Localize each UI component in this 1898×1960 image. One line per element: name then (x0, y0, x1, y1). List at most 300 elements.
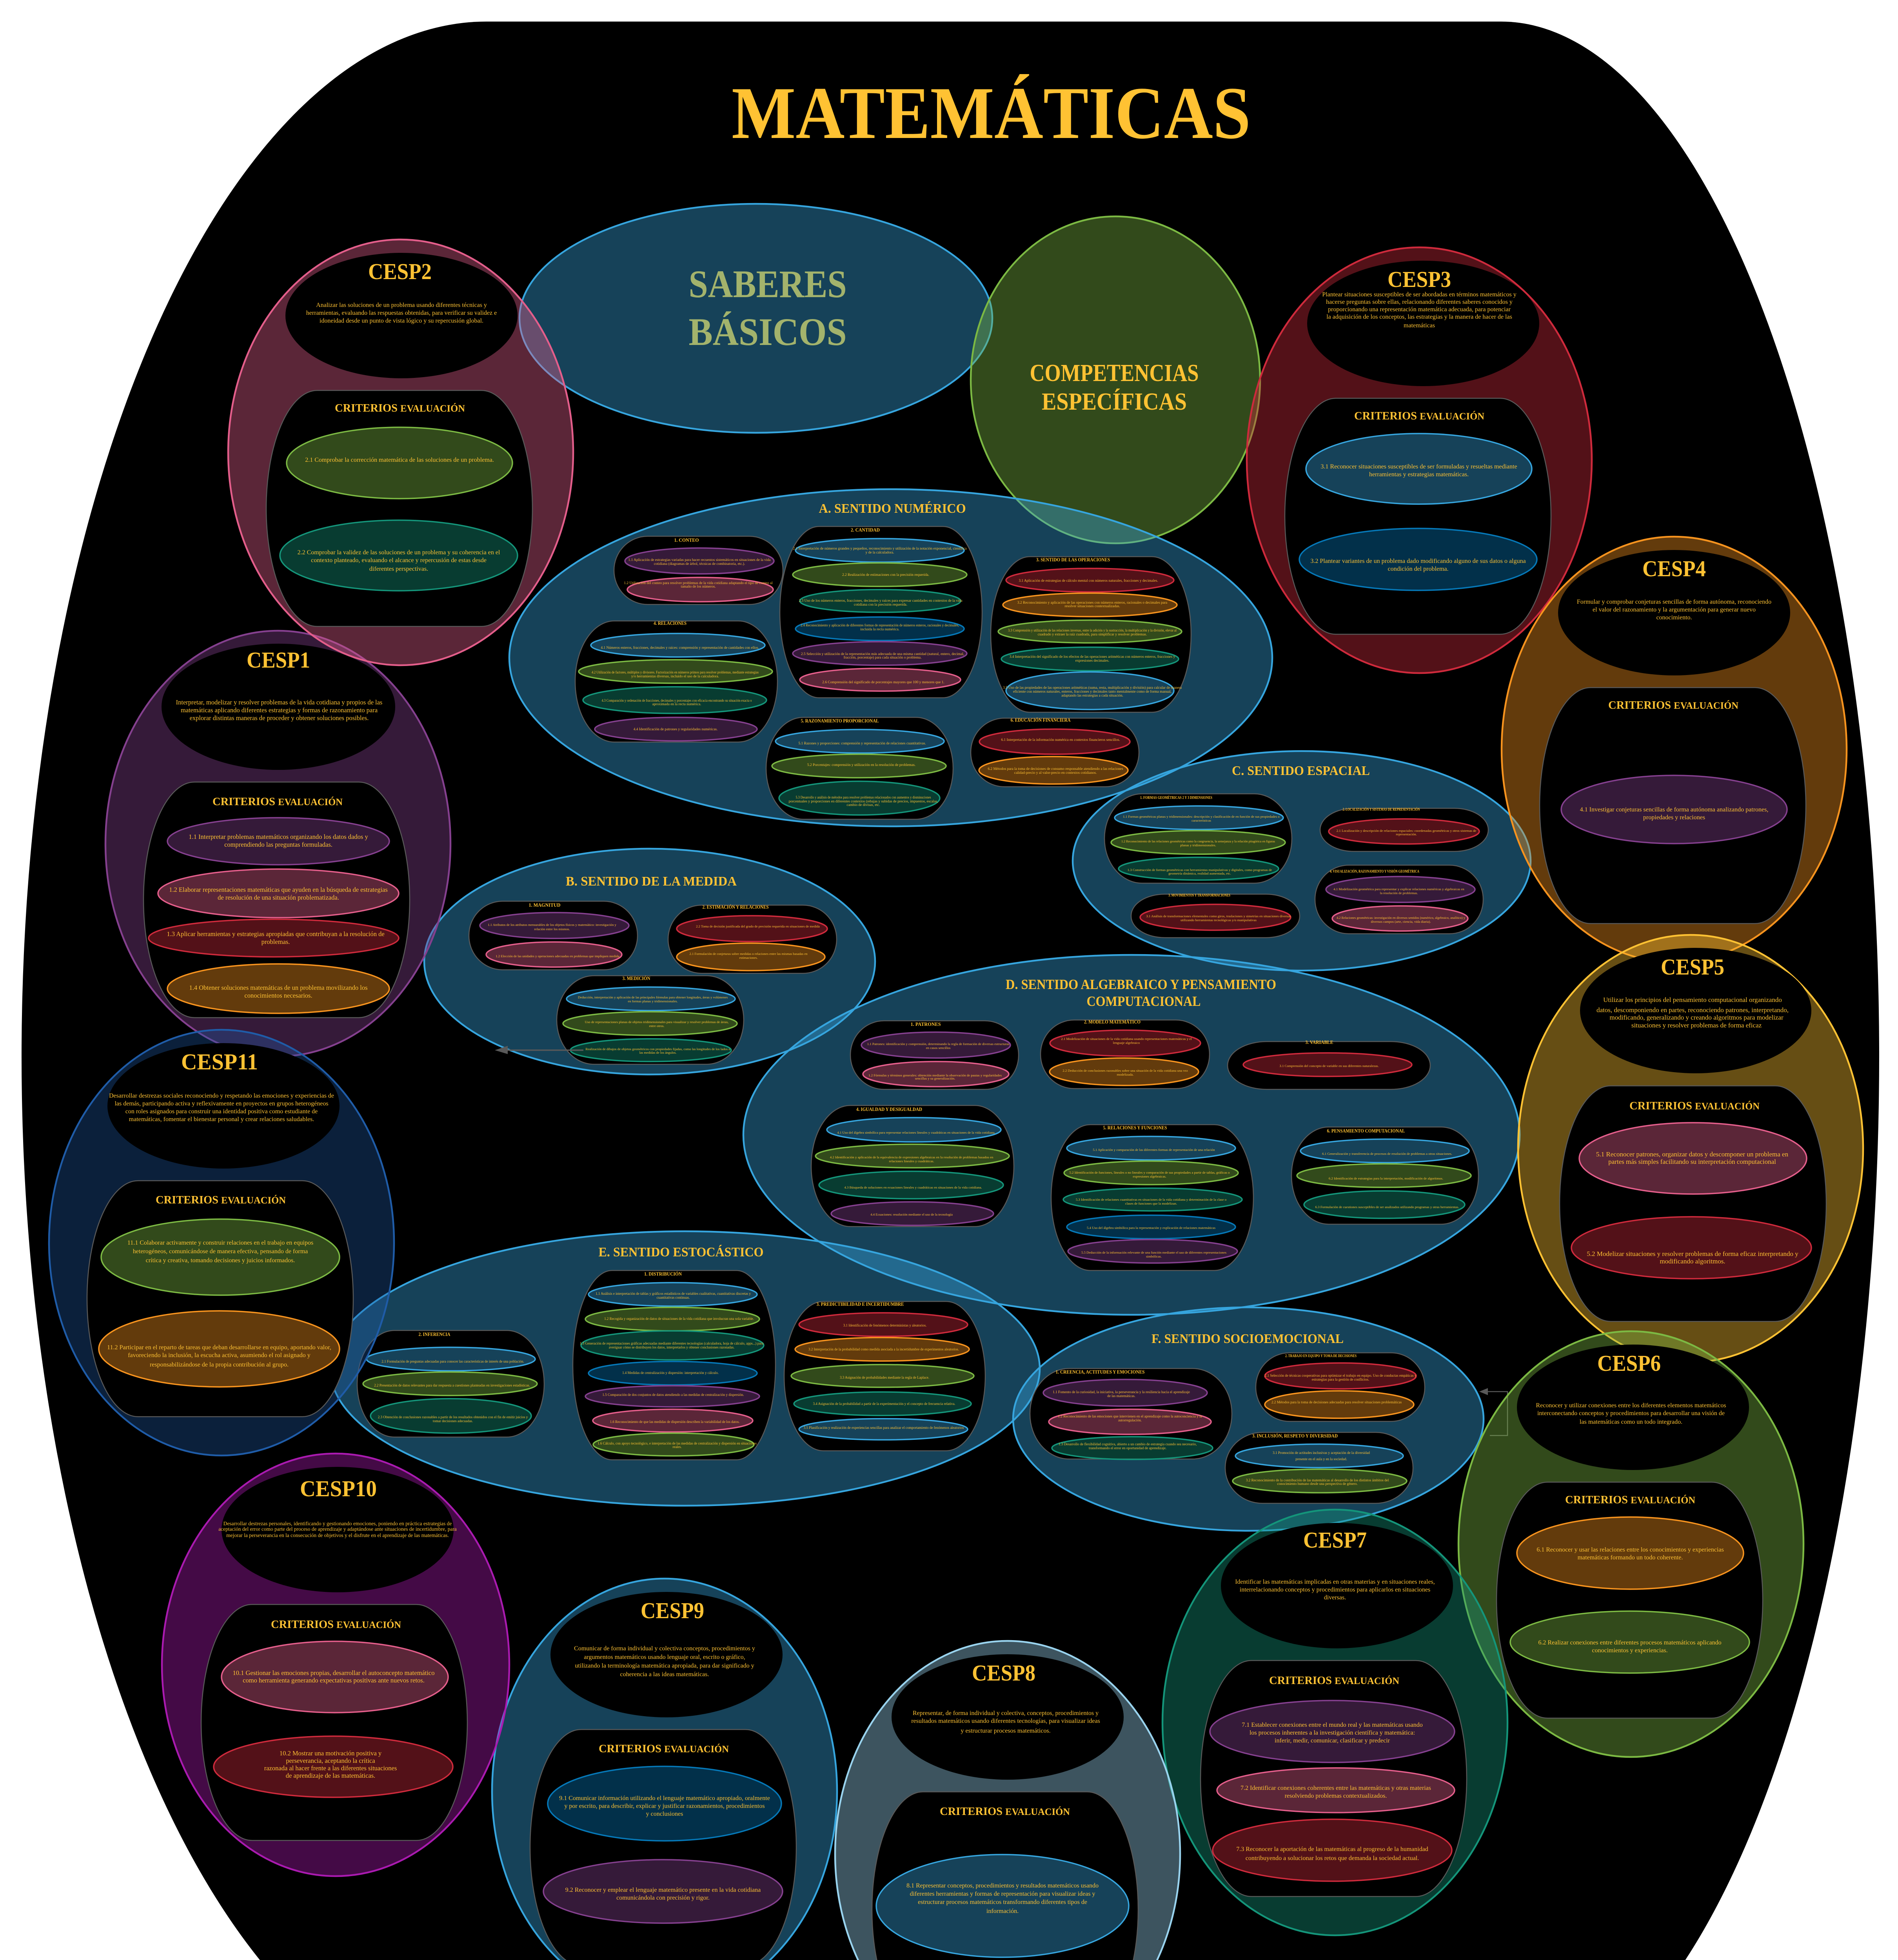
panel: 2 localización: 2. LOCALIZACIÓN Y SISTEMAS DE REPRESENTACIÓN (1342, 807, 1420, 812)
panel: 4 igualdad y desigualdad: 4.2 Identificación y aplicación de la equivalencia de expresiones algebraicas en la resolución de problemas basados en (830, 1155, 993, 1159)
panel: CESP3: 3.2 Plantear variantes de un problema dado modificando alguno de sus datos o alguna (1310, 558, 1526, 564)
panel: CESP7: CRITERIOS EVALUACIÓN (1269, 1674, 1399, 1687)
panel: 5 razonamiento proporcional: cambio de divisas, etc. (846, 803, 880, 807)
panel: 3 sentido de las operaciones: 3. SENTIDO DE LAS OPERACIONES (1036, 557, 1110, 563)
panel: 1 creencia, actitudes y emociones: 1.3 Desarrollo de flexibilidad cognitiva, abierto a un cambio de estrategia cuando sea necesario, (1059, 1442, 1197, 1446)
panel: 3 inclusión, respeto y diversidad: 3.1 Promoción de actitudes inclusivas y aceptación de la diversidad (1273, 1451, 1370, 1455)
panel: 4 relaciones: aproximada en la recta numérica. (652, 702, 701, 706)
panel: CESP8: y estructurar procesos matemáticos. (961, 1728, 1051, 1734)
panel: CESP6: CRITERIOS EVALUACIÓN (1565, 1494, 1695, 1506)
panel: 2 cantidad: 2.1 Interpretación de números grandes y pequeños, reconocimiento y utilización de la notación exponencial, científica (793, 547, 966, 551)
panel: CESP11 (49, 1030, 394, 1455)
panel: CESP3 (1247, 247, 1592, 673)
competencias específicas bubble (971, 216, 1260, 543)
panel: 2 localización: 2.1 Localización y descripción de relaciones espaciales: coordenadas geométricas y otros sistemas de (1337, 829, 1476, 833)
panel: CESP1: CRITERIOS EVALUACIÓN (213, 795, 343, 808)
panel: CESP9: y por escrito, para describir, explicar y justificar razonamientos, procedimientos (564, 1803, 765, 1809)
panel: CESP10: como herramienta generando expectativas positivas ante nuevos retos. (243, 1677, 425, 1684)
panel: 2 estimación y relaciones: 2.2 Toma de decisión justificada del grado de precisión requerida en situaciones de medida (696, 924, 820, 928)
panel: 3 medición (557, 975, 744, 1064)
panel: 1 conteo: 1.1 Aplicación de estrategias variadas para hacer recuentos sistemáticos en situaciones de la vida (628, 558, 770, 562)
panel: 1 magnitud: 1. MAGNITUD (529, 902, 561, 908)
panel: 3 inclusión, respeto y diversidad: 3.2 Reconocimiento de la contribución de las matemáticas al desarrollo de los distintos ámbitos del (1246, 1478, 1389, 1482)
panel: 3 sentido de las operaciones: cuadrado y extraer la raíz cuadrada, para simplificar y resolver problemas. (1038, 632, 1147, 637)
panel: 1 conteo: 1.2 Utilización del conteo para resolver problemas de la vida cotidiana adaptando el tipo de conteo al (624, 581, 773, 585)
panel: CESP11: CESP11 (181, 1049, 258, 1074)
panel: 1 magnitud: 1.1 Atributos de los atributos mensurables de los objetos físicos y matemático: investigación y (488, 923, 616, 927)
panel: 3 variable: 3. VARIABLE (1306, 1039, 1333, 1045)
section D: sentido algebraico y pensamiento computacional (743, 955, 1520, 1315)
panel: 4 visualización: 4.1 Modelización geométrica para representar y explicar relaciones numéricas y algebraicas en (1333, 887, 1464, 891)
panel: CESP1 (105, 631, 450, 1056)
panel: CESP11: responsabilizándose de la propia contribución al grupo. (150, 1361, 289, 1368)
panel: 1 formas geométricas: planas y tridimensionales. (1180, 843, 1216, 847)
panel: 3 sentido de las operaciones: 3.3 Comprensión y utilización de las relaciones inversas, entre la adición y la sustracción, la multiplicación y la división, elevar al (1008, 629, 1177, 633)
panel: 3 sentido de las operaciones (991, 557, 1191, 712)
section B: sentido de la medida: B. SENTIDO DE LA MEDIDA (566, 874, 737, 889)
panel: CESP10: 10.2 Mostrar una motivación positiva y (280, 1749, 381, 1757)
panel: 1 patrones: en casos sencillos (926, 1046, 951, 1050)
panel: 3 movimientos: 3.1 Análisis de transformaciones elementales como giros, traslaciones y simetrías en situaciones diversas (1146, 914, 1291, 918)
panel: CESP3: matemáticas (1404, 322, 1435, 329)
panel: CESP7 (1162, 1510, 1508, 1935)
panel: CESP6: conocimientos y experiencias. (1592, 1647, 1668, 1654)
panel: 3 predictibilidad e incertidumbre: 3.2 Interpretación de la probabilidad como medida asociada a la incertidumbre de experimentos aleatorios. (808, 1347, 959, 1351)
panel: 1 distribución: 1.5 Comparación de dos conjuntos de datos atendiendo a las medidas de centralización y dispersión. (603, 1393, 744, 1397)
panel: CESP7: los procesos inherentes a la investigación científica y matemática: (1250, 1730, 1415, 1736)
panel: CESP3: herramientas y estrategias matemáticas. (1369, 471, 1469, 478)
section E: sentido estocástico (330, 1231, 1040, 1506)
panel: CESP9: CRITERIOS EVALUACIÓN (599, 1742, 729, 1755)
panel: CESP2: CRITERIOS EVALUACIÓN (335, 402, 465, 414)
panel: CESP1: conocimientos necesarios. (244, 992, 312, 999)
panel: 2 estimación y relaciones: 2. ESTIMACIÓN Y RELACIONES (703, 904, 768, 910)
panel: 3 sentido de las operaciones: 3.1 Aplicación de estrategias de cálculo mental con números naturales, fracciones y decimales. (1019, 579, 1158, 583)
panel: 1 creencia, actitudes y emociones: 1. CREENCIA, ACTITUDES Y EMOCIONES (1055, 1369, 1145, 1375)
panel: 2 inferencia: tomar decisiones adecuadas. (433, 1419, 473, 1423)
panel: 5 relaciones y funciones: 5.5 Deducción de la información relevante de una función mediante el uso de diferentes representaciones (1081, 1250, 1226, 1254)
panel: 6 educación financiera (971, 717, 1139, 787)
panel: CESP2: herramientas, evaluando las respuestas obtenidas, para verificar su validez e (306, 310, 497, 316)
panel: CESP7: resolviendo problemas contextualizados. (1285, 1793, 1387, 1799)
panel: CESP4: CESP4 (1642, 556, 1706, 581)
panel: 1 creencia, actitudes y emociones: transformando el error en oportunidad de aprendizaje. (1089, 1446, 1166, 1450)
panel: 1 creencia, actitudes y emociones (1030, 1368, 1232, 1459)
panel: CESP3: hacerse preguntas sobre ellas, relacionando diferentes saberes conocidos y (1326, 299, 1513, 305)
panel: 3 predictibilidad e incertidumbre: 3.1 Identificación de fenómenos deterministas y aleatorios. (843, 1323, 926, 1327)
panel: 1 formas geométricas: 1.3 Construcción de formas geométricas con herramientas manipulativas y digitales, como programas de (1128, 868, 1272, 872)
panel: CESP1: 1.2 Elaborar representaciones matemáticas que ayuden en la búsqueda de estrategias (169, 886, 388, 893)
panel: 2 trabajo en equipo: 2.2 Métodos para la toma de decisiones adecuadas para resolver situaciones problemáticas (1271, 1400, 1402, 1404)
panel: 2 modelo matemático (1041, 1019, 1210, 1089)
section C: sentido espacial: C. SENTIDO ESPACIAL (1232, 764, 1370, 778)
panel: 1 creencia, actitudes y emociones: autorregulación. (1118, 1418, 1142, 1422)
panel: 4 relaciones: y/o herramientas diversas, incluido el uso de la calculadora. (631, 675, 719, 679)
panel: 5 relaciones y funciones: simbólicas. (1146, 1254, 1162, 1258)
panel: 2 inferencia (357, 1330, 544, 1437)
panel: 2 cantidad: incluida la recta numérica. (860, 628, 899, 632)
panel: CESP6: 6.1 Reconocer y usar las relaciones entre los conocimientos y experiencias (1537, 1546, 1724, 1553)
panel: 1 distribución: 1.1 Análisis e interpretación de tablas y gráficos estadísticos de variables cualitativas, cuantitativas discretas y (596, 1292, 751, 1296)
panel: 1 conteo: 1. CONTEO (674, 537, 699, 543)
panel: 5 relaciones y funciones: expresiones algebraicas. (1133, 1174, 1166, 1178)
panel: CESP10: 10.1 Gestionar las emociones propias, desarrollar el autoconcepto matemático (233, 1669, 434, 1677)
panel: CESP1: problemas. (262, 938, 290, 946)
panel: CESP10: perseverancia, aceptando la crítica (286, 1757, 375, 1764)
panel: 5 razonamiento proporcional: porcentuales y proporciones en diferentes contextos (rebajas y subidas de precios, impuestos, escalas, (789, 800, 938, 804)
panel: 4 igualdad y desigualdad: 4.3 Búsqueda de soluciones en ecuaciones lineales y cuadráticas en situaciones de la vida cotidiana. (844, 1185, 982, 1189)
panel: 2 estimación y relaciones (668, 904, 837, 973)
panel: CESP9: 9.2 Reconocer y emplear el lenguaje matemático presente en la vida cotidiana (565, 1887, 761, 1893)
section E: sentido estocástico: E. SENTIDO ESTOCÁSTICO (598, 1245, 764, 1259)
panel: 1 formas geométricas: 1.2 Reconocimiento de las relaciones geométricas como la congruencia, la semejanza y la relación pitagórica en figuras (1121, 839, 1275, 843)
panel: 6 educación financiera: 6.1 Interpretación de la información numérica en contextos financieros sencillos. (1001, 738, 1120, 742)
panel: 6 educación financiera: calidad-precio y al valor-precio en contextos cotidianos. (1014, 771, 1097, 775)
panel: CESP5: CRITERIOS EVALUACIÓN (1629, 1100, 1760, 1112)
panel: 6 educación financiera: 6.2 Métodos para la toma de decisiones de consumo responsable atendiendo a las relaciones (988, 767, 1123, 771)
panel: 4 relaciones (575, 620, 777, 742)
saberes básicos bubble: SABERES (688, 262, 847, 306)
panel: CESP1: CESP1 (247, 647, 310, 673)
section F: sentido socioemocional: F. SENTIDO SOCIOEMOCIONAL (1152, 1332, 1344, 1346)
panel: 3 sentido de las operaciones: 3.5 Uso de las propiedades de las operaciones aritméticas (suma, resta, multiplicación y división) para calcular de manera (1003, 686, 1182, 690)
panel: CESP7: contribuyendo a solucionar los retos que demanda la sociedad actual. (1246, 1855, 1419, 1862)
panel: CESP10: Desarrollar destrezas personales, identificando y gestionando emociones, poniendo en práctica estrategias de (223, 1521, 452, 1526)
panel: 2 inferencia: 2.3 Obtención de conclusiones razonables a partir de los resultados obtenidos con el fin de emitir juicios y (378, 1415, 528, 1419)
panel: 3 inclusión, respeto y diversidad (1225, 1432, 1413, 1503)
panel: 2 cantidad: fracción, porcentaje) para cada situación o problema. (844, 655, 921, 660)
panel: 3 predictibilidad e incertidumbre: 3.4 Asignación de la probabilidad a partir de la experimentación y el concepto de frecuencia relativa. (813, 1402, 955, 1406)
panel: 2 cantidad: 2.2 Realización de estimaciones con la precisión requerida. (842, 573, 929, 577)
panel: CESP10: razonada al hacer frente a las diferentes situaciones (264, 1764, 397, 1772)
panel: 3 inclusión, respeto y diversidad: 3. INCLUSIÓN, RESPETO Y DIVERSIDAD (1252, 1433, 1338, 1439)
panel: CESP6: las matemáticas como un todo integrado. (1580, 1419, 1682, 1425)
panel: 1 formas geométricas: 1. FORMAS GEOMÉTRICAS 2 Y 3 DIMENSIONES (1140, 795, 1212, 800)
panel: CESP1: 1.4 Obtener soluciones matemáticas de un problema movilizando los (189, 984, 368, 991)
panel: 1 distribución: 1.4 Medidas de centralización y dispersión: interpretación y cálculo. (622, 1371, 719, 1375)
panel: 2 inferencia: 2. INFERENCIA (419, 1331, 450, 1337)
panel: 3 variable: 3.1 Comprensión del concepto de variable en sus diferentes naturalezas. (1279, 1064, 1379, 1068)
panel: 1 formas geométricas: 1.1 Formas geométricas planas y tridimensionales: descripción y clasificación de en función de sus propiedades o (1123, 815, 1280, 818)
panel: 6 pensamiento computacional: 6.2 Identificación de estrategias para la interpretación, modificación de algoritmos. (1329, 1176, 1443, 1180)
panel: CESP7: inferir, medir, comunicar, clasificar y predecir (1275, 1737, 1390, 1744)
panel: 1 distribución: 1.6 Reconocimiento de que las medidas de dispersión describen la variabilidad de los datos. (610, 1420, 739, 1424)
panel: 5 razonamiento proporcional: 5. RAZONAMIENTO PROPORCIONAL (801, 718, 879, 724)
panel: CESP7: diversas. (1324, 1594, 1346, 1601)
panel: CESP3: CRITERIOS EVALUACIÓN (1354, 410, 1484, 422)
panel: 2 modelo matemático: 2.1 Modelización de situaciones de la vida cotidiana usando representaciones matemáticas y el (1061, 1037, 1192, 1041)
panel: 2 estimación y relaciones: estimaciones. (739, 956, 758, 960)
panel: CESP3: Plantear situaciones susceptibles de ser abordadas en términos matemáticos y (1322, 291, 1517, 298)
saberes básicos bubble (519, 204, 992, 433)
panel: 3 predictibilidad e incertidumbre: 3.5 Planificación y realización de experiencias sencillas para analizar el comportamiento de fenómenos aleatorios (804, 1426, 964, 1430)
section C: sentido espacial (1073, 751, 1531, 971)
panel: 5 relaciones y funciones: 5.3 Identificación de relaciones cuantitativas en situaciones de la vida cotidiana y determinación de la clase o (1076, 1198, 1226, 1201)
panel: 1 magnitud: relación entre los mismos. (534, 927, 570, 931)
panel: CESP8: información. (986, 1908, 1019, 1915)
panel: CESP8: estructurar procesos matemáticos transformando diferentes tipos de (918, 1899, 1087, 1906)
panel: 1 patrones: 1.2 Fórmulas y términos generales: obtención mediante la observación de pautas y regularidades (868, 1073, 1002, 1077)
panel: 5 razonamiento proporcional: 5.3 Desarrollo y análisis de métodos para resolver problemas relacionados con aumentos y disminuciones (796, 796, 931, 800)
panel: 1 creencia, actitudes y emociones: 1.1 Fomento de la curiosidad, la iniciativa, la perseverancia y la resiliencia hacia el aprendizaje (1053, 1390, 1190, 1394)
panel: 1 conteo: tamaño de los números. (681, 585, 716, 589)
panel: 3 movimientos: 3. MOVIMIENTOS Y TRANSFORMACIONES (1168, 893, 1230, 898)
panel: 1 patrones (850, 1021, 1019, 1089)
panel: CESP5: datos, descomponiendo en partes, reconociendo patrones, interpretando, (1596, 1006, 1789, 1014)
panel: 4 relaciones: 4.2 Utilización de factores, múltiplos y divisores. Factorización en números primos para resolver problemas, mediante estrategias (592, 670, 759, 675)
panel: 2 cantidad: 2.4 Reconocimiento y aplicación de diferentes formas de representación de números enteros, racionales y decimales, (801, 623, 959, 628)
panel: 4 visualización (1315, 865, 1483, 934)
panel: CESP2: CESP2 (368, 259, 432, 284)
section F: sentido socioemocional (1013, 1307, 1484, 1531)
panel: CESP6: interconectando conceptos y procedimientos para desarrollar una visión de (1537, 1410, 1725, 1417)
panel: 3 medición: en formas planas y tridimensionales. (628, 999, 678, 1003)
panel: CESP3: condición del problema. (1388, 566, 1449, 572)
panel: CESP6: CESP6 (1597, 1350, 1661, 1376)
panel: 3 inclusión, respeto y diversidad: presente en el aula y en la sociedad. (1295, 1457, 1347, 1461)
panel: 4 visualización: 4. VISUALIZACIÓN, RAZONAMIENTO Y VISIÓN GEOMÉTRICA (1330, 869, 1419, 874)
panel: 2 cantidad: y de la calculadora. (866, 551, 894, 555)
panel: CESP7: 7.2 Identificar conexiones coherentes entre las matemáticas y otras materias (1241, 1785, 1431, 1791)
panel: 5 razonamiento proporcional (766, 717, 953, 819)
panel: CESP5 (1518, 935, 1863, 1362)
panel: 6 pensamiento computacional (1291, 1127, 1478, 1224)
panel: CESP3: proporcionando una representación matemática adecuada, para potenciar (1328, 306, 1511, 313)
panel: 3 medición: 3. MEDICIÓN (623, 975, 650, 981)
panel: 1 conteo (614, 536, 783, 604)
panel: 3 sentido de las operaciones: adaptando las estrategias a cada situación. (1061, 694, 1123, 698)
panel: 1 patrones: 1.1 Patrones: identificación y comprensión, determinando la regla de formación de diversas estructuras (867, 1042, 1009, 1046)
panel: CESP5: Utilizar los principios del pensamiento computacional organizando (1603, 996, 1782, 1004)
panel: 1 distribución: 1.6 Cálculo, con apoyo tecnológico, e interpretación de las medidas de centralización y dispersión en situaciones (598, 1441, 757, 1445)
panel: CESP4: el valor del razonamiento y la argumentación para generar nuevo (1593, 606, 1756, 613)
panel: CESP5: partes más simples facilitando su interpretación computacional (1608, 1158, 1776, 1165)
panel: 2 inferencia: 2.2 Presentación de datos relevantes para dar respuesta a cuestiones planteadas en investigaciones estadísticas. (374, 1383, 530, 1387)
panel: 3 sentido de las operaciones: 3.4 Interpretación del significado de los efectos de las operaciones aritméticas con números enteros, fracciones y (1010, 655, 1175, 659)
panel: 1 distribución: reales. (672, 1445, 682, 1449)
panel: CESP4: conocimiento. (1656, 614, 1692, 621)
panel: CESP9: 9.1 Comunicar información utilizando el lenguaje matemático apropiado, oralmente (559, 1795, 770, 1802)
panel: 1 magnitud (469, 901, 638, 970)
panel: 3 medición: Uso de representaciones planas de objetos tridimensionales para visualizar y resolver problemas de áreas, (585, 1020, 728, 1024)
panel: 3 sentido de las operaciones: 3.2 Reconocimiento y aplicación de las operaciones con números enteros, racionales o decimales para (1017, 601, 1167, 605)
competencias específicas bubble: COMPETENCIAS (1030, 360, 1199, 387)
panel: 1 distribución: 1.3 Generación de representaciones gráficas adecuadas mediante diferentes tecnologías (calculadora, hoja de cálculo, apps...) para (580, 1341, 763, 1345)
panel: CESP2 (228, 240, 573, 665)
panel: 1 formas geométricas: características (1191, 818, 1211, 822)
panel: CESP2: Analizar las soluciones de un problema usando diferentes técnicas y (316, 302, 487, 309)
panel: CESP9: comunicándola con precisión y rigor. (616, 1895, 710, 1901)
panel: CESP2: contexto planteado, evaluando el alcance y repercusión de estas desde (311, 557, 487, 564)
panel: 1 formas geométricas (1104, 794, 1292, 883)
panel: 6 educación financiera: 6. EDUCACIÓN FINANCIERA (1011, 717, 1071, 723)
panel: CESP11: 11.1 Colaborar activamente y construir relaciones en el trabajo en equipos (127, 1240, 313, 1246)
panel: 3 medición: Deducción, interpretación y aplicación de las principales fórmulas para obtener longitudes, áreas y volúmenes (578, 995, 728, 999)
section B: sentido de la medida (424, 849, 875, 1074)
panel: 5 relaciones y funciones (1051, 1125, 1253, 1270)
panel: CESP5: CESP5 (1661, 954, 1724, 980)
panel: 3 inclusión, respeto y diversidad: conocimiento humano desde una perspectiva de género. (1277, 1482, 1358, 1486)
panel: 2 trabajo en equipo: estrategias para la gestión de conflictos. (1312, 1377, 1369, 1381)
panel: CESP5: 5.2 Modelizar situaciones y resolver problemas de forma eficaz interpretando y (1587, 1250, 1798, 1258)
panel: 5 relaciones y funciones: clases de funciones que la modelizan. (1125, 1201, 1177, 1205)
panel: CESP7: 7.1 Establecer conexiones entre el mundo real y las matemáticas usando (1242, 1722, 1423, 1728)
section D: sentido algebraico y pensamiento computacional: COMPUTACIONAL (1087, 993, 1201, 1009)
panel: CESP1: 1.1 Interpretar problemas matemáticos organizando los datos dados y (189, 833, 368, 840)
panel: 6 pensamiento computacional: 6.1 Generalización y transferencia de procesos de resolución de problemas a otras situaciones. (1322, 1152, 1452, 1156)
title: MATEMÁTICAS (732, 72, 1251, 154)
panel: 4 igualdad y desigualdad: 4.1 Uso del álgebra simbólica para representar relaciones lineales y cuadráticas en situaciones de la vida cotidiana. (837, 1131, 995, 1134)
panel: 2 cantidad: 2.6 Comprensión del significado de porcentajes mayores que 100 y menores que 1. (822, 680, 944, 684)
panel: 5 relaciones y funciones: 5.4 Uso del álgebra simbólica para la representación y explicación de relaciones matemáticas (1087, 1226, 1216, 1230)
panel: CESP11: las demás, participando activa y reflexivamente en proyectos en grupos heterogéneos (114, 1100, 329, 1107)
panel: 3 medición: Realización de dibujos de objetos geométricos con propiedades fijadas, como las longitudes de los lados o (585, 1047, 730, 1051)
panel: CESP2: 2.2 Comprobar la validez de las soluciones de un problema y su coherencia en el (298, 549, 500, 556)
panel: 5 razonamiento proporcional: 5.2 Porcentajes: comprensión y utilización en la resolución de problemas. (807, 763, 915, 767)
panel: 3 sentido de las operaciones: eficiente con números naturales, enteros, fracciones y decimales tanto mentalmente como de forma manual, (1013, 690, 1171, 694)
panel: 6 pensamiento computacional: 6.3 Formulación de cuestiones susceptibles de ser analizados utilizando programas y otras herramientas. (1315, 1205, 1459, 1209)
panel: 1 distribución: cuantitativas continuas. (657, 1296, 690, 1299)
panel: 4 visualización: 4.2 Relaciones geométricas: investigación en diversos sentidos (numérico, algebraico, analítico) y (1337, 916, 1466, 920)
panel: CESP7: Identificar las matemáticas implicadas en otras materias y en situaciones reales, (1235, 1579, 1435, 1585)
panel: CESP6: Reconocer y utilizar conexiones entre los diferentes elementos matemáticos (1536, 1402, 1726, 1409)
panel: CESP10: mejorar la perseverancia en la consecución de objetivos y el disfrute en el aprendizaje de las matemáticas. (226, 1532, 449, 1538)
panel: 4 igualdad y desigualdad: 4.4 Ecuaciones: resolución mediante el uso de la tecnología (870, 1212, 953, 1216)
panel: CESP4: CRITERIOS EVALUACIÓN (1608, 699, 1738, 711)
panel: CESP8 (835, 1641, 1180, 1960)
panel: CESP11: matemáticas, fomentar el bienestar personal y crear relaciones saludables. (129, 1116, 314, 1123)
panel: CESP2: diferentes perspectivas. (369, 566, 428, 572)
panel: CESP8: diferentes herramientas y formas de representación para visualizar ideas y (910, 1891, 1095, 1897)
panel: CESP10: aceptación del error como parte del proceso de aprendizaje y adaptándose ante situaciones de incertidumbre, para (218, 1526, 457, 1532)
panel: 2 modelo matemático: 2. MODELO MATEMÁTICO (1084, 1019, 1141, 1025)
panel: CESP9: y conclusiones (646, 1811, 683, 1817)
panel: 2 trabajo en equipo (1256, 1353, 1425, 1421)
panel: 5 razonamiento proporcional: 5.1 Razones y proporciones: comprensión y representación de relaciones cuantitativas. (798, 742, 926, 746)
panel: CESP9: Comunicar de forma individual y colectiva conceptos, procedimientos y (574, 1645, 755, 1652)
section A: sentido numérico: A. SENTIDO NUMÉRICO (819, 501, 966, 516)
panel: CESP5: modificando, generalizando y creando algoritmos para modelizar (1609, 1014, 1784, 1021)
panel: 3 sentido de las operaciones: resolver situaciones contextualizadas. (1064, 604, 1120, 608)
panel: CESP9: argumentos matemáticos usando lenguaje oral, escrito o gráfico, (584, 1654, 745, 1661)
panel: CESP11: 11.2 Participar en el reparto de tareas que deban desarrollarse en equipo, aportando valor, (107, 1344, 331, 1351)
panel: 2 localización: representación. (1396, 832, 1417, 836)
panel: 5 relaciones y funciones: 5. RELACIONES Y FUNCIONES (1103, 1125, 1167, 1131)
panel: CESP10: CESP10 (300, 1476, 377, 1501)
panel: 2 cantidad: 2.5 Selección y utilización de la representación más adecuada de una misma cantidad (natural, entero, decimal, (801, 652, 964, 656)
panel: 1 conteo: cotidiana (diagramas de árbol, técnicas de combinatoria, etc.). (654, 562, 745, 566)
panel: 2 cantidad: cotidiana con la precisión requerida. (854, 603, 907, 607)
panel: CESP1: de resolución de una situación problematizada. (218, 894, 339, 901)
panel: 3 predictibilidad e incertidumbre: 3.3 Asignación de probabilidades mediante la regla de Laplace. (840, 1376, 929, 1379)
panel: CESP3: CESP3 (1388, 267, 1451, 292)
panel: CESP1: comprendiendo las preguntas formuladas. (224, 841, 332, 848)
panel: CESP9 (492, 1579, 837, 1960)
panel: CESP9: utilizando la terminología matemática apropiada, para dar significado y (575, 1662, 754, 1669)
panel: 2 modelo matemático: modelizada. (1117, 1073, 1133, 1076)
panel: CESP4: Formular y comprobar conjeturas sencillas de forma autónoma, reconociendo (1577, 599, 1771, 605)
panel: 2 inferencia: 2.1 Formulación de preguntas adecuadas para conocer las características de interés de una población. (381, 1359, 524, 1363)
panel: 5 relaciones y funciones: 5.1 Aplicación y comparación de las diferentes formas de representación de una relación (1093, 1148, 1215, 1152)
panel: 1 distribución (573, 1270, 776, 1460)
panel: 2 cantidad: 2.3 Uso de los números enteros, fracciones, decimales y raíces para expresar cantidades en contextos de la vida (799, 599, 963, 603)
panel: CESP11: CRITERIOS EVALUACIÓN (156, 1194, 286, 1206)
panel: CESP2: idoneidad desde un punto de vista lógico y su repercusión global. (320, 318, 483, 324)
panel: 1 distribución: averiguar cómo se distribuyen los datos, interpretarlos y obtener conclusiones razonadas. (609, 1345, 734, 1349)
panel: 1 formas geométricas: geometría dinámica, realidad aumentada, etc. (1168, 871, 1231, 875)
panel: CESP8: CRITERIOS EVALUACIÓN (940, 1805, 1070, 1818)
panel: CESP11: heterogéneos, comunicándose de manera efectiva, pensando de forma (133, 1248, 308, 1255)
saberes básicos bubble: BÁSICOS (688, 310, 847, 354)
panel: 4 igualdad y desigualdad (811, 1105, 1014, 1227)
panel: 3 movimientos: utilizando herramientas tecnológicas y/o manipulativas (1181, 918, 1257, 922)
panel: CESP7: 7.3 Reconocer la aportación de las matemáticas al progreso de la humanidad (1236, 1846, 1428, 1853)
panel: CESP6 (1458, 1331, 1804, 1757)
panel: CESP1: matemáticas aplicando diferentes estrategias y formas de razonamiento para (181, 706, 378, 714)
panel: 4 relaciones: 4.1 Números enteros, fracciones, decimales y raíces: comprensión y representación de cantidades con ellos. (601, 646, 759, 650)
panel: CESP2: 2.1 Comprobar la corrección matemática de las soluciones de un problema. (305, 457, 494, 463)
panel: 3 variable (1228, 1039, 1430, 1089)
arrow: CESP6 to socioemocional (1479, 1388, 1508, 1436)
panel: 2 trabajo en equipo: 2. TRABAJO EN EQUIPO Y TOMA DE DECISIONES (1285, 1354, 1357, 1358)
panel: 4 relaciones: 4. RELACIONES (654, 620, 687, 626)
panel: 3 movimientos (1131, 893, 1300, 938)
panel: 4 visualización: diversos campos (arte, ciencia, vida diaria). (1371, 920, 1431, 924)
panel: CESP6: 6.2 Realizar conexiones entre diferentes procesos matemáticos aplicando (1538, 1639, 1722, 1646)
panel: 1 patrones: sencillas y su generalización. (915, 1076, 955, 1080)
panel: 6 pensamiento computacional: 6. PENSAMIENTO COMPUTACIONAL (1327, 1128, 1405, 1134)
panel: 4 igualdad y desigualdad: 4. IGUALDAD Y DESIGUALDAD (856, 1106, 922, 1112)
panel: 3 sentido de las operaciones: expresiones decimales. (1075, 659, 1109, 663)
panel: CESP1: Interpretar, modelizar y resolver problemas de la vida cotidiana y propios de las (176, 699, 382, 706)
panel: CESP1: explorar distintas maneras de proceder y obtener soluciones posibles. (190, 714, 369, 722)
panel: 5 relaciones y funciones: 5.2 Identificación de funciones, lineales o no lineales y comparación de sus propiedades a partir de tablas, gráficas o (1069, 1171, 1230, 1174)
panel: 3 predictibilidad e incertidumbre: 3. PREDICTIBILIDAD E INCERTIDUMBRE (816, 1301, 904, 1307)
panel: 2 cantidad: 2. CANTIDAD (851, 527, 880, 533)
panel: 1 distribución: 1.2 Recogida y organización de datos de situaciones de la vida cotidiana que involucran una sola variable. (604, 1317, 754, 1321)
section A: sentido numérico (509, 489, 1272, 826)
panel: CESP10 (162, 1454, 509, 1876)
panel: 2 estimación y relaciones: 2.1 Formulación de conjeturas sobre medidas o relaciones entre las mismas basadas en (689, 952, 808, 956)
panel: CESP5: modificando algoritmos. (1660, 1258, 1725, 1265)
panel: CESP11: favoreciendo la inclusión, la escucha activa, asumiendo el rol asignado y (128, 1352, 311, 1359)
panel: CESP11: crítica y creativa, tomando decisiones y juicios informados. (146, 1257, 295, 1264)
panel: 1 creencia, actitudes y emociones: de las matemáticas. (1107, 1394, 1135, 1398)
panel: CESP8: resultados matemáticos usando diferentes tecnologías, para visualizar ideas (911, 1718, 1100, 1724)
panel: CESP11: Desarrollar destrezas sociales reconociendo y respetando las emociones y experiencias de (109, 1093, 334, 1099)
panel: 1 patrones: 1. PATRONES (910, 1021, 941, 1027)
panel: CESP3: la adquisición de los conceptos, las estrategias y la manera de hacer de las (1326, 314, 1512, 320)
panel: 3 medición: las medidas de los ángulos. (639, 1051, 676, 1054)
section D: sentido algebraico y pensamiento computacional: D. SENTIDO ALGEBRAICO Y PENSAMIENTO (1006, 976, 1276, 992)
panel: CESP1: 1.3 Aplicar herramientas y estrategias apropiadas que contribuyan a la resolución de (167, 930, 385, 938)
panel: 3 medición: entre otros. (649, 1024, 665, 1028)
panel: 2 modelo matemático: lenguaje algebraico (1113, 1041, 1140, 1045)
panel: CESP7: interrelacionando conceptos y procedimientos para aplicarlos en situaciones (1240, 1586, 1430, 1593)
panel: CESP10: de aprendizaje de las matemáticas. (286, 1772, 375, 1779)
panel: CESP7: CESP7 (1303, 1527, 1367, 1553)
panel: CESP4 (1502, 537, 1847, 962)
panel: 4 relaciones: 4.3 Comparación y ordenación de fracciones, decimales y porcentajes con eficacia encontrando su situación exacta o (601, 699, 752, 703)
panel: CESP9: CESP9 (641, 1598, 704, 1623)
panel: CESP5: situaciones y resolver problemas de forma eficaz (1631, 1022, 1762, 1029)
panel: CESP10: CRITERIOS EVALUACIÓN (271, 1618, 401, 1631)
panel: 4 visualización: la resolución de problemas. (1380, 891, 1418, 895)
panel: CESP8: 8.1 Representar conceptos, procedimientos y resultados matemáticos usando (906, 1882, 1099, 1889)
panel: CESP9: coherencia a las ideas matemáticas. (620, 1671, 709, 1678)
panel: 1 creencia, actitudes y emociones: 1.2 Reconocimiento de las emociones que intervienen en el aprendizaje como la autoconciencia y la (1058, 1414, 1202, 1418)
arrow: medición to left (495, 1046, 583, 1054)
